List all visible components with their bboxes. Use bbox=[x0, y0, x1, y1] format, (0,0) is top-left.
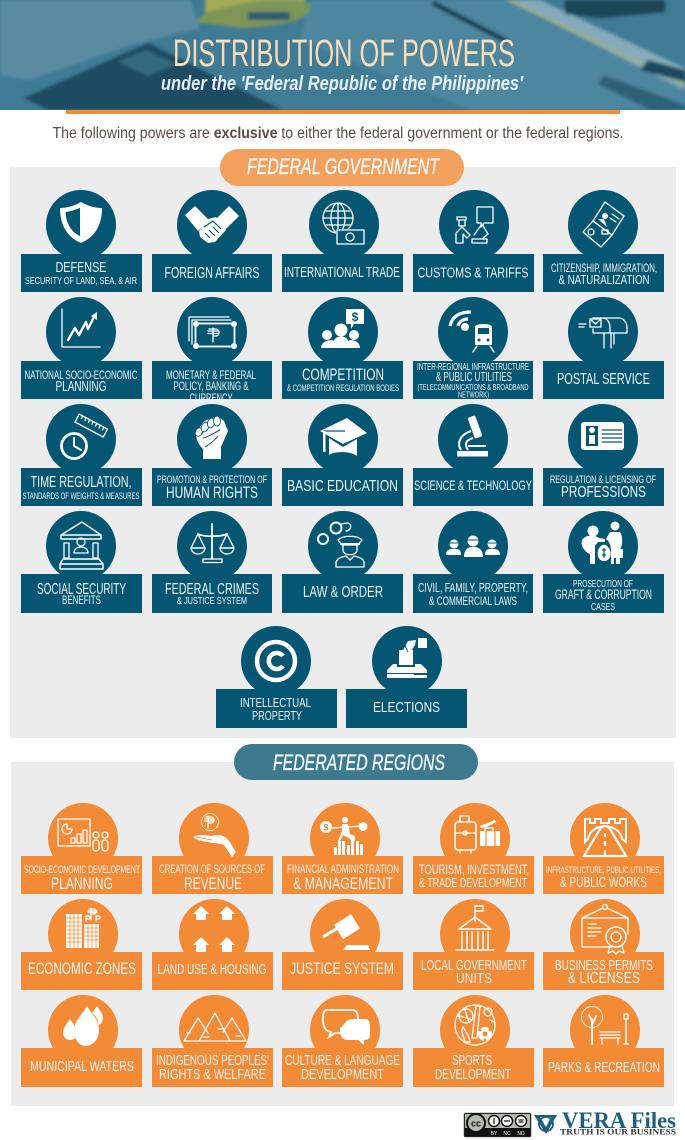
icon: graduation cap bbox=[320, 418, 367, 456]
card: time regulation bbox=[21, 404, 142, 506]
icon: speech bubbles bbox=[323, 1010, 370, 1045]
icon: banknotes bbox=[189, 317, 237, 349]
heading pill: federated regions: FEDERATED REGIONS bbox=[273, 750, 445, 775]
icon: three workers bbox=[446, 536, 500, 557]
title: DISTRIBUTION OF POWERS bbox=[173, 33, 515, 75]
card: municipal waters bbox=[21, 995, 142, 1087]
vera files logo bbox=[534, 1108, 676, 1136]
icon: mailbox bbox=[579, 318, 627, 348]
vera files logo: VERA Files bbox=[562, 1108, 676, 1133]
card: business permits: & LICENSES bbox=[568, 970, 640, 987]
card: monetary policy: POLICY, BANKING & bbox=[174, 381, 249, 393]
card: business permits bbox=[543, 899, 664, 990]
creative commons badge: cc bbox=[471, 1118, 481, 1128]
card: intellectual property bbox=[216, 626, 337, 728]
card: sources of revenue: REVENUE bbox=[184, 874, 242, 893]
panel: federal government bbox=[10, 167, 676, 738]
icon: bribery exchange bbox=[582, 522, 623, 564]
card: postal service bbox=[543, 297, 664, 399]
card: financial administration: FINANCIAL ADMINISTRATION bbox=[287, 864, 399, 876]
card: financial administration: & MANAGEMENT bbox=[293, 874, 393, 893]
card: elections bbox=[346, 626, 467, 728]
subtitle: under the 'Federal Republic of the Philippines' bbox=[161, 73, 524, 95]
card: sources of revenue bbox=[152, 803, 273, 894]
icon: customs officer bbox=[456, 207, 493, 243]
card: financial administration bbox=[282, 803, 403, 894]
card: federal crimes: & JUSTICE SYSTEM bbox=[177, 595, 247, 607]
card: science and technology bbox=[413, 404, 533, 506]
icon: handshake bbox=[185, 206, 239, 243]
icon: passport bbox=[583, 202, 624, 247]
card: social security bbox=[21, 511, 142, 613]
icon: handcuffs and officer bbox=[318, 522, 364, 567]
header banner bbox=[0, 0, 685, 110]
card: federal crimes: FEDERAL CRIMES bbox=[165, 581, 259, 598]
icon: scales of justice bbox=[191, 524, 234, 562]
card: local government bbox=[413, 899, 534, 990]
card: civil laws bbox=[413, 511, 533, 613]
icon: people and speech bubble: $ bbox=[352, 310, 359, 324]
icon: coin over hand bbox=[193, 814, 236, 857]
icon: water drops bbox=[63, 1006, 103, 1046]
card: social security: SOCIAL SECURITY bbox=[37, 581, 126, 598]
card: infrastructure: INTER-REGIONAL INFRASTRUCTURE bbox=[417, 362, 529, 373]
creative commons badge bbox=[464, 1113, 531, 1137]
card: justice system bbox=[282, 899, 403, 990]
card: sports development: SPORTS bbox=[452, 1053, 492, 1069]
card: foreign affairs: FOREIGN AFFAIRS bbox=[164, 265, 260, 282]
card: national planning: PLANNING bbox=[56, 379, 106, 395]
card: intellectual property: PROPERTY bbox=[252, 708, 302, 723]
icon: microscope bbox=[457, 415, 488, 456]
icon: luggage and plane bbox=[455, 816, 500, 853]
icon: person balancing coins on bars: $ bbox=[323, 822, 329, 832]
icon: presentation board and people bbox=[58, 819, 108, 851]
icon: bank building bbox=[60, 522, 103, 569]
card: tourism: TOURISM, INVESTMENT, bbox=[419, 861, 529, 877]
icon: ballot box bbox=[387, 638, 427, 678]
heading pill: federal government: FEDERAL GOVERNMENT bbox=[247, 154, 440, 179]
icon: government hall with flag bbox=[456, 906, 494, 950]
card: law and order: LAW & ORDER bbox=[303, 584, 383, 601]
vera files logo: TRUTH IS OUR BUSINESS bbox=[560, 1126, 676, 1136]
intro text: The following powers are exclusive to either the federal government or the federal regions. bbox=[52, 125, 624, 142]
card: citizenship bbox=[543, 190, 664, 292]
card: basic education bbox=[282, 404, 403, 506]
card: graft and corruption: CASES bbox=[591, 602, 615, 613]
card: human rights: PROMOTION & PROTECTION OF bbox=[157, 474, 267, 486]
card: defense: SECURITY OF LAND, SEA, & AIR bbox=[25, 275, 137, 287]
card: time regulation: TIME REGULATION, bbox=[30, 474, 132, 491]
card: professions bbox=[543, 404, 664, 506]
card: competition: COMPETITION bbox=[302, 365, 384, 384]
card: infrastructure: (TELECOMMUNICATIONS & BROADBAND bbox=[418, 382, 528, 392]
card: local government: UNITS bbox=[456, 970, 492, 987]
card: competition: & COMPETITION REGULATION BODIES bbox=[287, 383, 399, 394]
card: economic zones: ECONOMIC ZONES bbox=[28, 959, 136, 978]
card: indigenous peoples: INDIGENOUS PEOPLES' bbox=[156, 1052, 269, 1069]
card: human rights bbox=[152, 404, 272, 506]
icon: sports balls bbox=[455, 1005, 495, 1045]
creative commons badge: NC bbox=[503, 1131, 511, 1137]
card: customs and tariffs: CUSTOMS & TARIFFS bbox=[418, 264, 528, 282]
card: municipal waters: MUNICIPAL WATERS bbox=[30, 1059, 134, 1075]
icon: road through castle gate bbox=[584, 819, 626, 856]
card: socio-economic planning: SOCIO-ECONOMIC DEVELOPMENT bbox=[24, 864, 140, 876]
card: graft and corruption bbox=[543, 511, 664, 613]
card: infrastructure and public works bbox=[543, 803, 664, 894]
card: indigenous peoples bbox=[152, 995, 273, 1087]
icon: wifi and train bbox=[450, 312, 494, 352]
card: intellectual property: INTELLECTUAL bbox=[240, 695, 311, 710]
card: justice system: JUSTICE SYSTEM bbox=[290, 959, 394, 978]
icon: raised fist bbox=[194, 416, 228, 459]
card: international trade bbox=[282, 190, 403, 292]
card: law and order bbox=[282, 511, 403, 613]
card: economic zones bbox=[21, 899, 142, 990]
card: monetary policy bbox=[152, 297, 272, 405]
card: socio-economic planning bbox=[21, 803, 142, 894]
card: sports development bbox=[413, 995, 534, 1087]
card: time regulation: STANDARDS OF WEIGHTS & MEASURES bbox=[22, 491, 140, 502]
card: postal service: POSTAL SERVICE bbox=[557, 371, 650, 388]
card: defense: DEFENSE bbox=[56, 259, 106, 276]
icon: globe and money bbox=[323, 203, 366, 245]
card: national planning: NATIONAL SOCIO-ECONOMIC bbox=[24, 368, 138, 382]
card: land use: LAND USE & HOUSING bbox=[158, 962, 266, 978]
icon: copyright bbox=[257, 642, 295, 680]
heading pill: federal government bbox=[220, 149, 464, 186]
card: science and technology: SCIENCE & TECHNOLOGY bbox=[414, 478, 532, 493]
card: federal crimes bbox=[152, 511, 272, 613]
card: infrastructure: & PUBLIC UTILITIES bbox=[436, 370, 512, 384]
card: tourism bbox=[413, 803, 534, 894]
card: social security: BENEFITS bbox=[62, 595, 101, 607]
icon: framed certificate with seal bbox=[582, 904, 628, 954]
icon: id card bbox=[581, 422, 624, 450]
card: defense bbox=[21, 190, 142, 292]
card: graft and corruption: PROSECUTION OF bbox=[573, 578, 633, 590]
card: culture and language: CULTURE & LANGUAGE bbox=[285, 1052, 400, 1069]
card: monetary policy: MONETARY & FEDERAL bbox=[166, 370, 256, 382]
card: civil laws: CIVIL, FAMILY, PROPERTY, bbox=[418, 580, 528, 595]
card: basic education: BASIC EDUCATION bbox=[287, 478, 398, 495]
icon: shield bbox=[60, 202, 102, 243]
card: national planning bbox=[21, 297, 142, 399]
card: international trade: INTERNATIONAL TRADE bbox=[284, 264, 400, 281]
creative commons badge: ND bbox=[517, 1131, 525, 1137]
card: sports development: DEVELOPMENT bbox=[435, 1067, 511, 1083]
card: human rights: HUMAN RIGHTS bbox=[166, 483, 258, 502]
card: culture and language bbox=[282, 995, 403, 1087]
icon: clock and ruler bbox=[62, 414, 107, 458]
card: competition bbox=[282, 297, 403, 399]
card: customs and tariffs bbox=[413, 190, 534, 292]
card: infrastructure bbox=[413, 297, 533, 400]
icon: gavel bbox=[323, 914, 370, 950]
creative commons badge: BY bbox=[491, 1131, 498, 1137]
card: sources of revenue: CREATION OF SOURCES OF bbox=[159, 862, 265, 876]
card: parks and recreation bbox=[543, 995, 664, 1087]
card: indigenous peoples: RIGHTS & WELFARE bbox=[159, 1066, 266, 1083]
card: land use bbox=[152, 899, 273, 990]
card: civil laws: & COMMERCIAL LAWS bbox=[429, 594, 517, 608]
card: socio-economic planning: PLANNING bbox=[51, 874, 113, 893]
card: citizenship: & NATURALIZATION bbox=[558, 272, 650, 287]
icon: tree, bench and lamp bbox=[582, 1006, 628, 1044]
card: foreign affairs bbox=[152, 190, 272, 292]
card: tourism: & TRADE DEVELOPMENT bbox=[419, 876, 527, 890]
panel: federated regions bbox=[11, 762, 674, 1106]
card: local government: LOCAL GOVERNMENT bbox=[421, 958, 527, 974]
icon: four houses bbox=[193, 906, 235, 952]
orange divider bar bbox=[66, 110, 620, 114]
card: infrastructure: NETWORK) bbox=[458, 390, 489, 400]
card: professions: PROFESSIONS bbox=[561, 484, 646, 501]
icon: mountains bbox=[184, 1013, 246, 1041]
heading pill: federated regions bbox=[234, 744, 478, 780]
card: elections: ELECTIONS bbox=[373, 699, 440, 716]
card: culture and language: DEVELOPMENT bbox=[301, 1066, 384, 1083]
icon: rising chart bbox=[62, 309, 100, 347]
icon: office towers and peso bbox=[66, 908, 100, 948]
card: monetary policy: CURRENCY bbox=[190, 393, 233, 405]
